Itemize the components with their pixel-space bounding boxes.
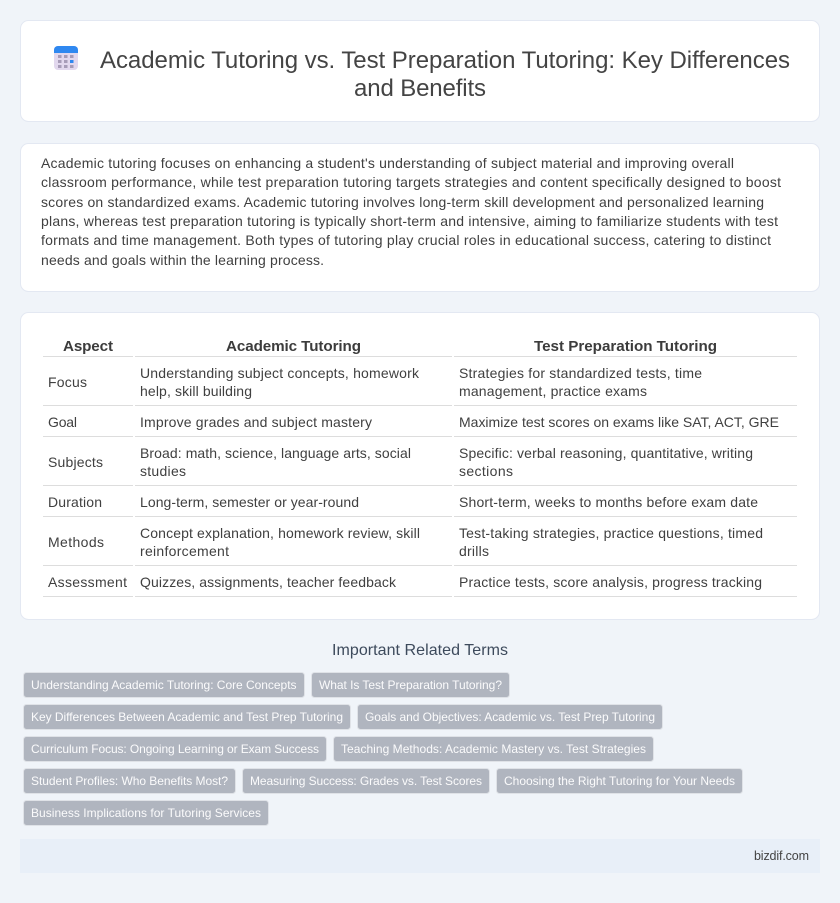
row: methods: Test-taking strategies, practice questions, timed [459,525,763,541]
row: methods: Methods [48,534,104,550]
tag: Goals and Objectives: Academic vs. Test Prep Tutoring [365,710,655,724]
row: focus: Focus [48,374,87,390]
tag [24,672,304,698]
tag: Key Differences Between Academic and Test Prep Tutoring [31,710,343,724]
tag: Choosing the Right Tutoring for Your Needs [504,774,735,788]
tag [334,736,654,762]
table header: Test Preparation Tutoring [534,338,717,355]
tag [24,736,326,762]
tag [24,704,350,730]
tag: Business Implications for Tutoring Services [31,806,261,820]
title [100,47,790,102]
text block: intro paragraph: scores on standardized exams. Academic tutoring involves long-term skill development and personalized learning [41,194,764,210]
row: duration: Duration [48,494,102,510]
row: goal: Maximize test scores on exams like SAT, ACT, GRE [459,414,779,430]
tag: Curriculum Focus: Ongoing Learning or Exam Success [31,742,319,756]
row: subjects: studies [140,463,186,479]
tag: Understanding Academic Tutoring: Core Concepts [31,678,296,692]
row: focus: management, practice exams [459,383,647,399]
panel: header [20,20,820,122]
tag: Measuring Success: Grades vs. Test Scores [250,774,482,788]
row: methods [48,525,763,559]
row: subjects [48,445,753,479]
row: subjects: Broad: math, science, language arts, social [140,445,411,461]
title: Academic Tutoring vs. Test Preparation Tutoring: Key Differences [100,47,790,74]
tag: Teaching Methods: Academic Mastery vs. Test Strategies [341,742,646,756]
panel: comparison table [20,312,820,620]
table header [63,338,717,355]
text block: intro paragraph: plans, whereas test preparation tutoring is typically short-term and intensive, aiming to familiarize students with test [41,213,778,229]
row: goal: Goal [48,414,77,430]
tag: What Is Test Preparation Tutoring? [319,678,502,692]
tag [24,800,268,826]
row: subjects: Specific: verbal reasoning, quantitative, writing [459,445,753,461]
tag [312,672,510,698]
row: methods: drills [459,543,489,559]
text block: intro paragraph: Academic tutoring focuses on enhancing a student's understanding of subject material and improving overall [41,155,734,171]
row: focus: Strategies for standardized tests, time [459,365,702,381]
tag group: related terms [24,672,742,826]
row: goal: Improve grades and subject mastery [140,414,372,430]
footer [20,839,820,873]
row: assessment [48,574,762,590]
row: methods: reinforcement [140,543,229,559]
panel: introduction [20,144,820,292]
text block: intro paragraph [41,155,781,268]
row: focus [48,365,702,399]
text block: intro paragraph: formats and time management. Both types of tutoring play crucial roles in educational success, catering to distinct [41,232,771,248]
row: subjects: sections [459,463,513,479]
text block: intro paragraph: needs and goals within the learning process. [41,252,324,268]
table header: Aspect [63,338,113,355]
row: duration: Short-term, weeks to months before exam date [459,494,758,510]
tag [242,768,490,794]
icon: calendar [54,46,78,70]
row: assessment: Quizzes, assignments, teacher feedback [140,574,397,590]
row: focus: Understanding subject concepts, homework [140,365,420,381]
title: and Benefits [354,75,486,102]
row: assessment: Practice tests, score analysis, progress tracking [459,574,762,590]
heading: important related terms: Important Related Terms [332,642,508,659]
footer: bizdif.com [754,849,809,863]
text block: intro paragraph: classroom performance, while test preparation tutoring targets strategies and content specifically designed to boost [41,174,781,190]
row: goal [48,414,779,430]
row: assessment: Assessment [48,574,127,590]
tag [24,768,236,794]
tag: Student Profiles: Who Benefits Most? [31,774,228,788]
tag [358,704,662,730]
tag [496,768,742,794]
row: duration [48,494,758,510]
row: duration: Long-term, semester or year-round [140,494,359,510]
row: methods: Concept explanation, homework review, skill [140,525,420,541]
table header: Academic Tutoring [226,338,361,355]
row: subjects: Subjects [48,454,103,470]
row: focus: help, skill building [140,383,252,399]
